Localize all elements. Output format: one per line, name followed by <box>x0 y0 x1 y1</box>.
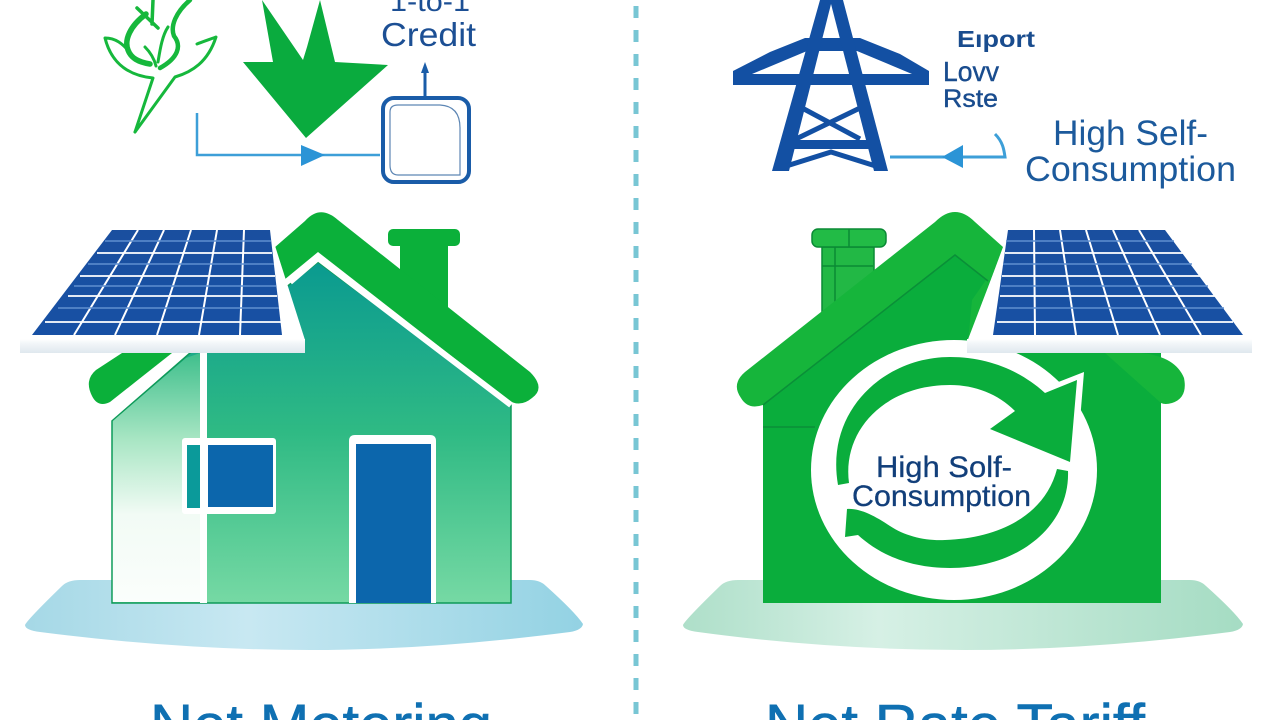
center label <box>852 451 1031 513</box>
solar panel <box>967 230 1252 353</box>
door <box>349 435 436 603</box>
icon: meter box <box>383 98 469 182</box>
ground: right green shadow <box>683 580 1243 650</box>
house wall <box>763 255 1161 603</box>
label: export low rate <box>943 26 1035 113</box>
label: export low rate: Lovv <box>943 56 999 87</box>
label: high self-consumption: High Self- <box>1053 114 1208 153</box>
cycle arrow lower <box>845 469 1068 568</box>
arrow: meter to credit <box>421 62 429 97</box>
house: net rate tariff <box>737 212 1252 603</box>
roof <box>737 212 1003 406</box>
chimney <box>812 229 886 317</box>
label: high self-consumption: Consumption <box>1025 150 1236 189</box>
cycle arrow upper <box>836 357 1077 485</box>
icon: transmission tower <box>733 0 929 171</box>
arrow: blue consumption to tower line <box>890 134 1005 168</box>
arrow: blue solar to meter line <box>197 113 380 166</box>
chimney <box>388 229 460 314</box>
house wall <box>112 262 511 603</box>
label: 1-to-1 credit: Credit <box>381 16 476 53</box>
white frame behind arrow tip <box>1043 372 1084 470</box>
solar panel <box>20 230 305 353</box>
icon: green flame and leaves outline <box>105 0 216 132</box>
center label: Consumption <box>852 480 1031 513</box>
label: 1-to-1 credit <box>381 0 476 53</box>
label: export low rate: Rste <box>943 85 998 113</box>
ground: left blue shadow <box>25 580 583 650</box>
arrow: big green down arrow <box>243 0 388 138</box>
label: high self-consumption <box>1025 114 1236 189</box>
left eave <box>89 353 172 404</box>
window <box>182 438 276 514</box>
label: export low rate: Eıport <box>957 26 1035 52</box>
white circle <box>811 340 1097 600</box>
roof white edge <box>290 258 511 405</box>
center dashed divider <box>634 6 638 720</box>
house: net metering <box>20 212 539 603</box>
center label: High Solf- <box>876 451 1012 484</box>
roof <box>274 212 539 404</box>
vertical conduit <box>200 353 207 603</box>
right eave <box>1105 353 1185 404</box>
